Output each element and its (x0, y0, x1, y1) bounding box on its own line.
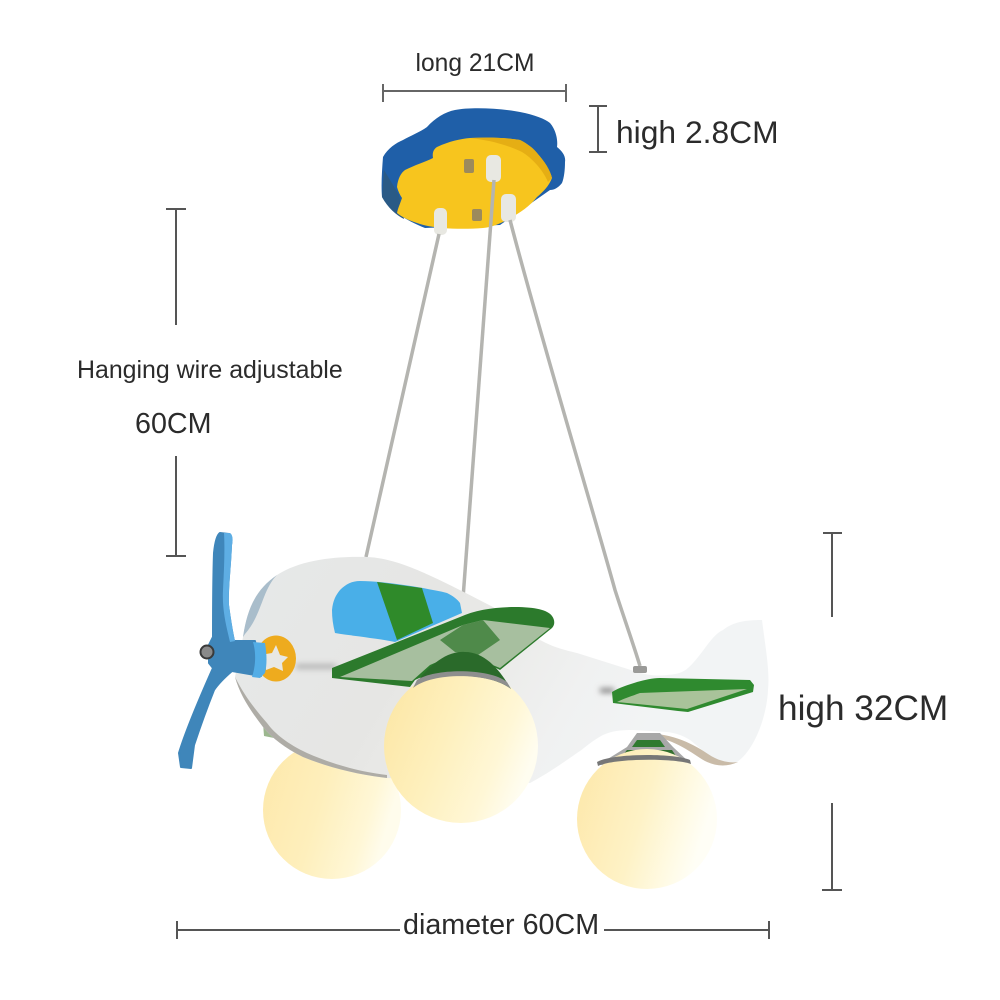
airplane fuselage (235, 557, 768, 783)
label: high 32CM: high 32CM (778, 689, 948, 728)
label: long 21CM (383, 50, 566, 102)
label: long 21CM: long 21CM (416, 50, 534, 77)
front lamp holder (413, 652, 511, 689)
label: hanging wire adjustable 60CM: 60CM (135, 408, 212, 440)
front wing (332, 607, 554, 689)
ceiling canopy (382, 108, 565, 235)
label: diameter 60CM: diameter 60CM (403, 909, 599, 941)
mounting screws (464, 159, 482, 221)
label: high 32CM (778, 533, 948, 890)
front globe lamp (384, 669, 538, 823)
nose star badge (252, 636, 296, 682)
label: high 2.8CM (589, 106, 779, 152)
propeller (179, 533, 261, 768)
cockpit window (332, 581, 462, 642)
hanging wires (366, 180, 640, 666)
label: diameter 60CM (177, 909, 769, 941)
rear globe lamp (263, 723, 401, 879)
tail globe lamp (577, 733, 717, 889)
label: hanging wire adjustable 60CM (77, 209, 343, 556)
wire mount on tail (633, 666, 647, 673)
wire connectors (434, 155, 516, 235)
label: hanging wire adjustable 60CM: Hanging wire adjustable (77, 356, 343, 384)
label: high 2.8CM: high 2.8CM (616, 114, 779, 150)
rear wing (612, 678, 754, 712)
propeller hub (200, 646, 214, 658)
